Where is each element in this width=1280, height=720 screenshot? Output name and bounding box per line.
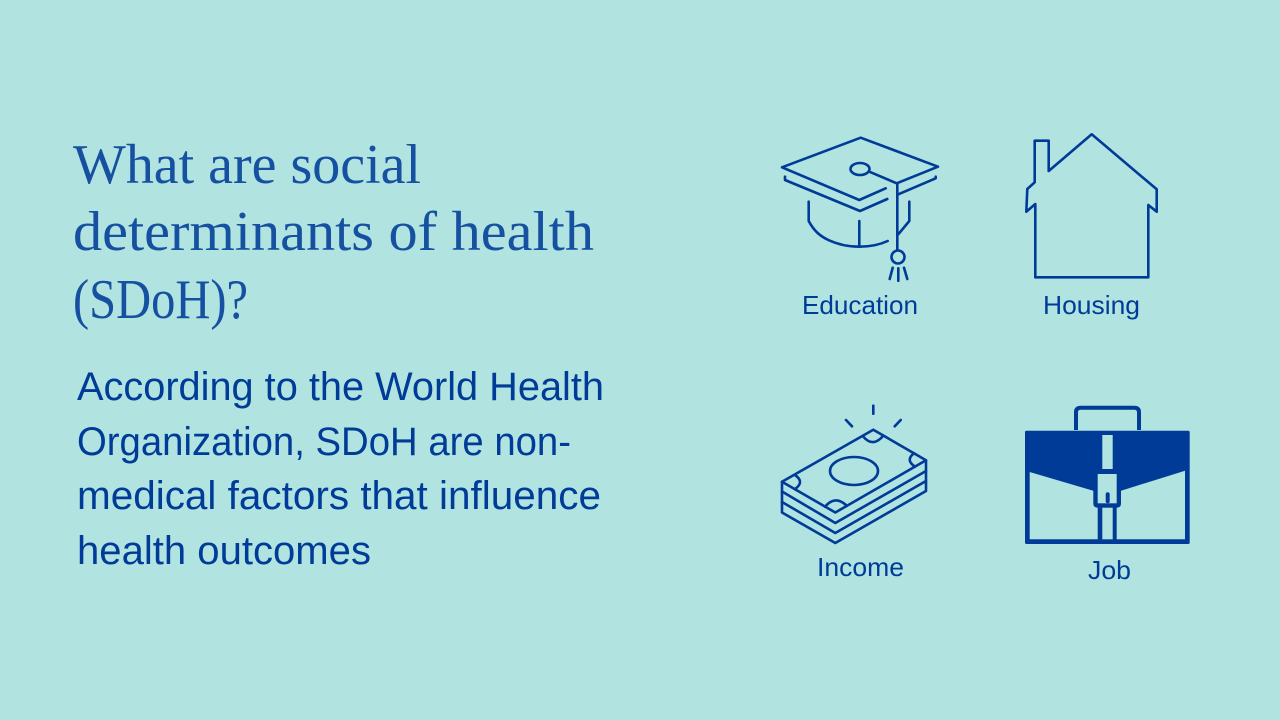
label: Income: Income — [817, 552, 904, 582]
title — [73, 134, 594, 331]
text block: WHO definition — [77, 365, 604, 573]
text block: WHO definition: health outcomes — [77, 529, 371, 573]
title: What are social — [73, 134, 421, 196]
label: Housing: Housing — [1043, 290, 1140, 320]
icon: house — [1026, 134, 1157, 277]
title: determinants of health — [73, 201, 594, 263]
icon: stack of money — [782, 406, 926, 543]
title: (SDoH)? — [73, 269, 248, 331]
label: Education: Education — [802, 290, 918, 320]
text block: WHO definition: According to the World Health — [77, 365, 604, 409]
icon: graduation cap — [782, 138, 938, 281]
text block: WHO definition: Organization, SDoH are non- — [77, 420, 571, 464]
label: Job: Job — [1088, 555, 1131, 585]
icon: briefcase — [1025, 408, 1190, 544]
text block: WHO definition: medical factors that influence — [77, 474, 601, 518]
